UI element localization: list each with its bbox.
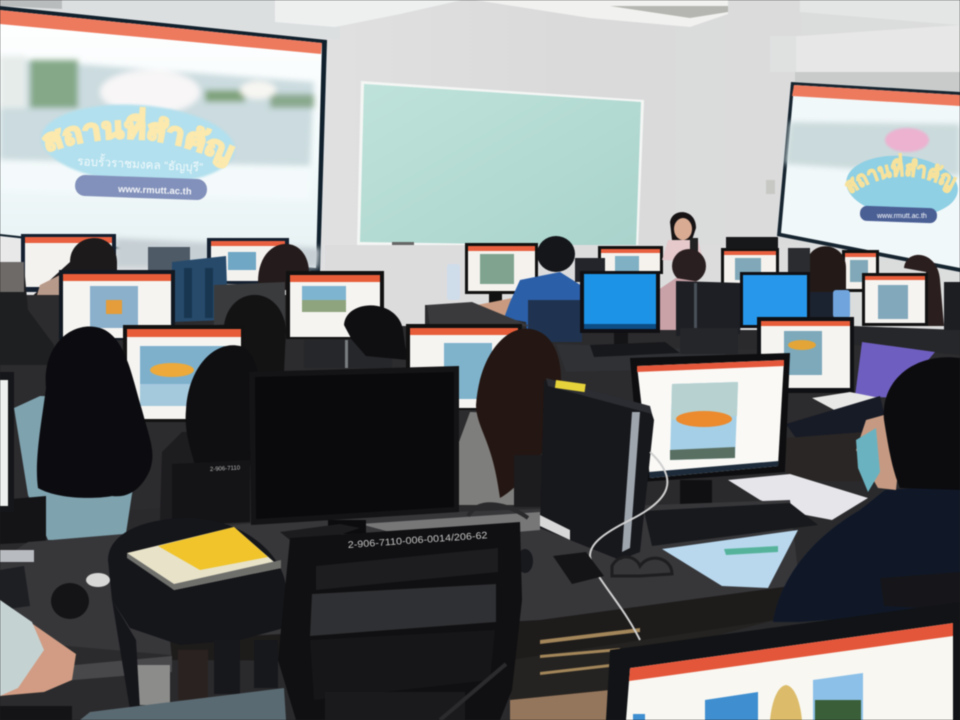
keyboard under monitor [280, 524, 360, 548]
url pill [75, 175, 207, 200]
monitor slide row three right [757, 317, 854, 393]
monitor blue right [740, 272, 810, 328]
backpack and book [108, 518, 286, 710]
person: left blue shirt [14, 327, 152, 540]
chair label second: 2-906-7110 [210, 465, 241, 473]
monitor bottom left [80, 688, 286, 720]
air conditioner [475, 0, 728, 27]
white cable [590, 452, 667, 640]
slide image right [813, 673, 863, 720]
tower near wall [788, 248, 810, 274]
person: back left [28, 238, 117, 325]
water bottle back [447, 264, 460, 300]
chair back centre [278, 522, 522, 720]
folder with pen [662, 530, 798, 588]
person: row two short hair [344, 305, 408, 360]
far monitors [21, 234, 879, 306]
monitor bottom right [606, 602, 960, 720]
person: arm behind right [786, 396, 888, 444]
person: row two dark hair [224, 295, 286, 372]
mouse [517, 549, 533, 573]
keyboard and papers far left [0, 550, 110, 610]
far monitor 3 [465, 243, 538, 306]
person: instructor [662, 212, 704, 262]
phone [553, 552, 604, 584]
water bottle [833, 290, 850, 318]
dark right edge [852, 326, 960, 355]
monitor slide right [862, 273, 928, 326]
keyboard blue desktop [590, 342, 680, 357]
monitor blue desktop [580, 271, 660, 346]
middle monitors [59, 270, 960, 422]
far monitor 6 [842, 250, 879, 292]
mid floor [0, 295, 960, 520]
tower centre right [676, 281, 743, 354]
person: back right 1 [806, 246, 846, 318]
desk front [0, 500, 800, 720]
person: pink top [658, 249, 706, 330]
right slide title: สถานที่สำคัญ [844, 152, 958, 194]
whiteboard [357, 81, 644, 249]
monitor row three centre [406, 324, 522, 410]
desk: back right [786, 430, 890, 482]
person: blue shirt [472, 236, 582, 342]
person: bottom left sleeve [0, 600, 76, 720]
slide image centre [770, 685, 802, 720]
bag back left [0, 256, 228, 365]
chair label: 2-906-7110-006-0014/206-62 [347, 530, 488, 551]
person: front right with mask [773, 357, 960, 622]
far monitor 2 [207, 238, 289, 284]
pc tower [540, 378, 654, 560]
person: left dark hair [160, 345, 260, 520]
back row people [28, 212, 944, 342]
person: back right 2 [904, 255, 944, 326]
chair arm cables [440, 664, 506, 720]
right url pill [860, 206, 937, 223]
papers on right desk [728, 474, 868, 520]
person: centre long brown hair [456, 329, 561, 507]
right url: www.rmutt.ac.th [876, 213, 927, 220]
towers centre [214, 282, 392, 368]
front black monitor [249, 366, 459, 534]
monitor row two centre [286, 271, 384, 339]
papers far right [812, 392, 880, 412]
notebook [127, 527, 281, 590]
slide subtitle: รอบรั้วราชมงคล “ธัญบุรี” [77, 152, 204, 176]
purple box [855, 342, 935, 398]
tower right of screen [575, 258, 605, 282]
mouse left [51, 583, 89, 619]
monitor row two left [59, 270, 175, 340]
desk speaker [726, 237, 778, 249]
glasses [612, 557, 672, 576]
slide image left [705, 692, 758, 720]
projection screen right [776, 81, 960, 273]
projection screen left [0, 5, 328, 272]
monitor: large slide [630, 353, 790, 507]
slide thumbnail [670, 382, 738, 460]
far monitor 5 [721, 248, 779, 288]
back wall lower and far desks [148, 180, 805, 370]
slide image far left [633, 714, 645, 720]
url: www.rmutt.ac.th [117, 184, 192, 198]
person: back centre [258, 244, 309, 290]
far monitor 1 [21, 234, 116, 292]
far monitor 4 [598, 246, 663, 274]
badge [39, 98, 237, 190]
monitor row three left [123, 325, 245, 422]
cable [468, 504, 528, 518]
slide title: สถานที่สำคัญ [41, 106, 236, 169]
keyboard front right [644, 503, 818, 546]
chair back near left people [0, 372, 250, 544]
